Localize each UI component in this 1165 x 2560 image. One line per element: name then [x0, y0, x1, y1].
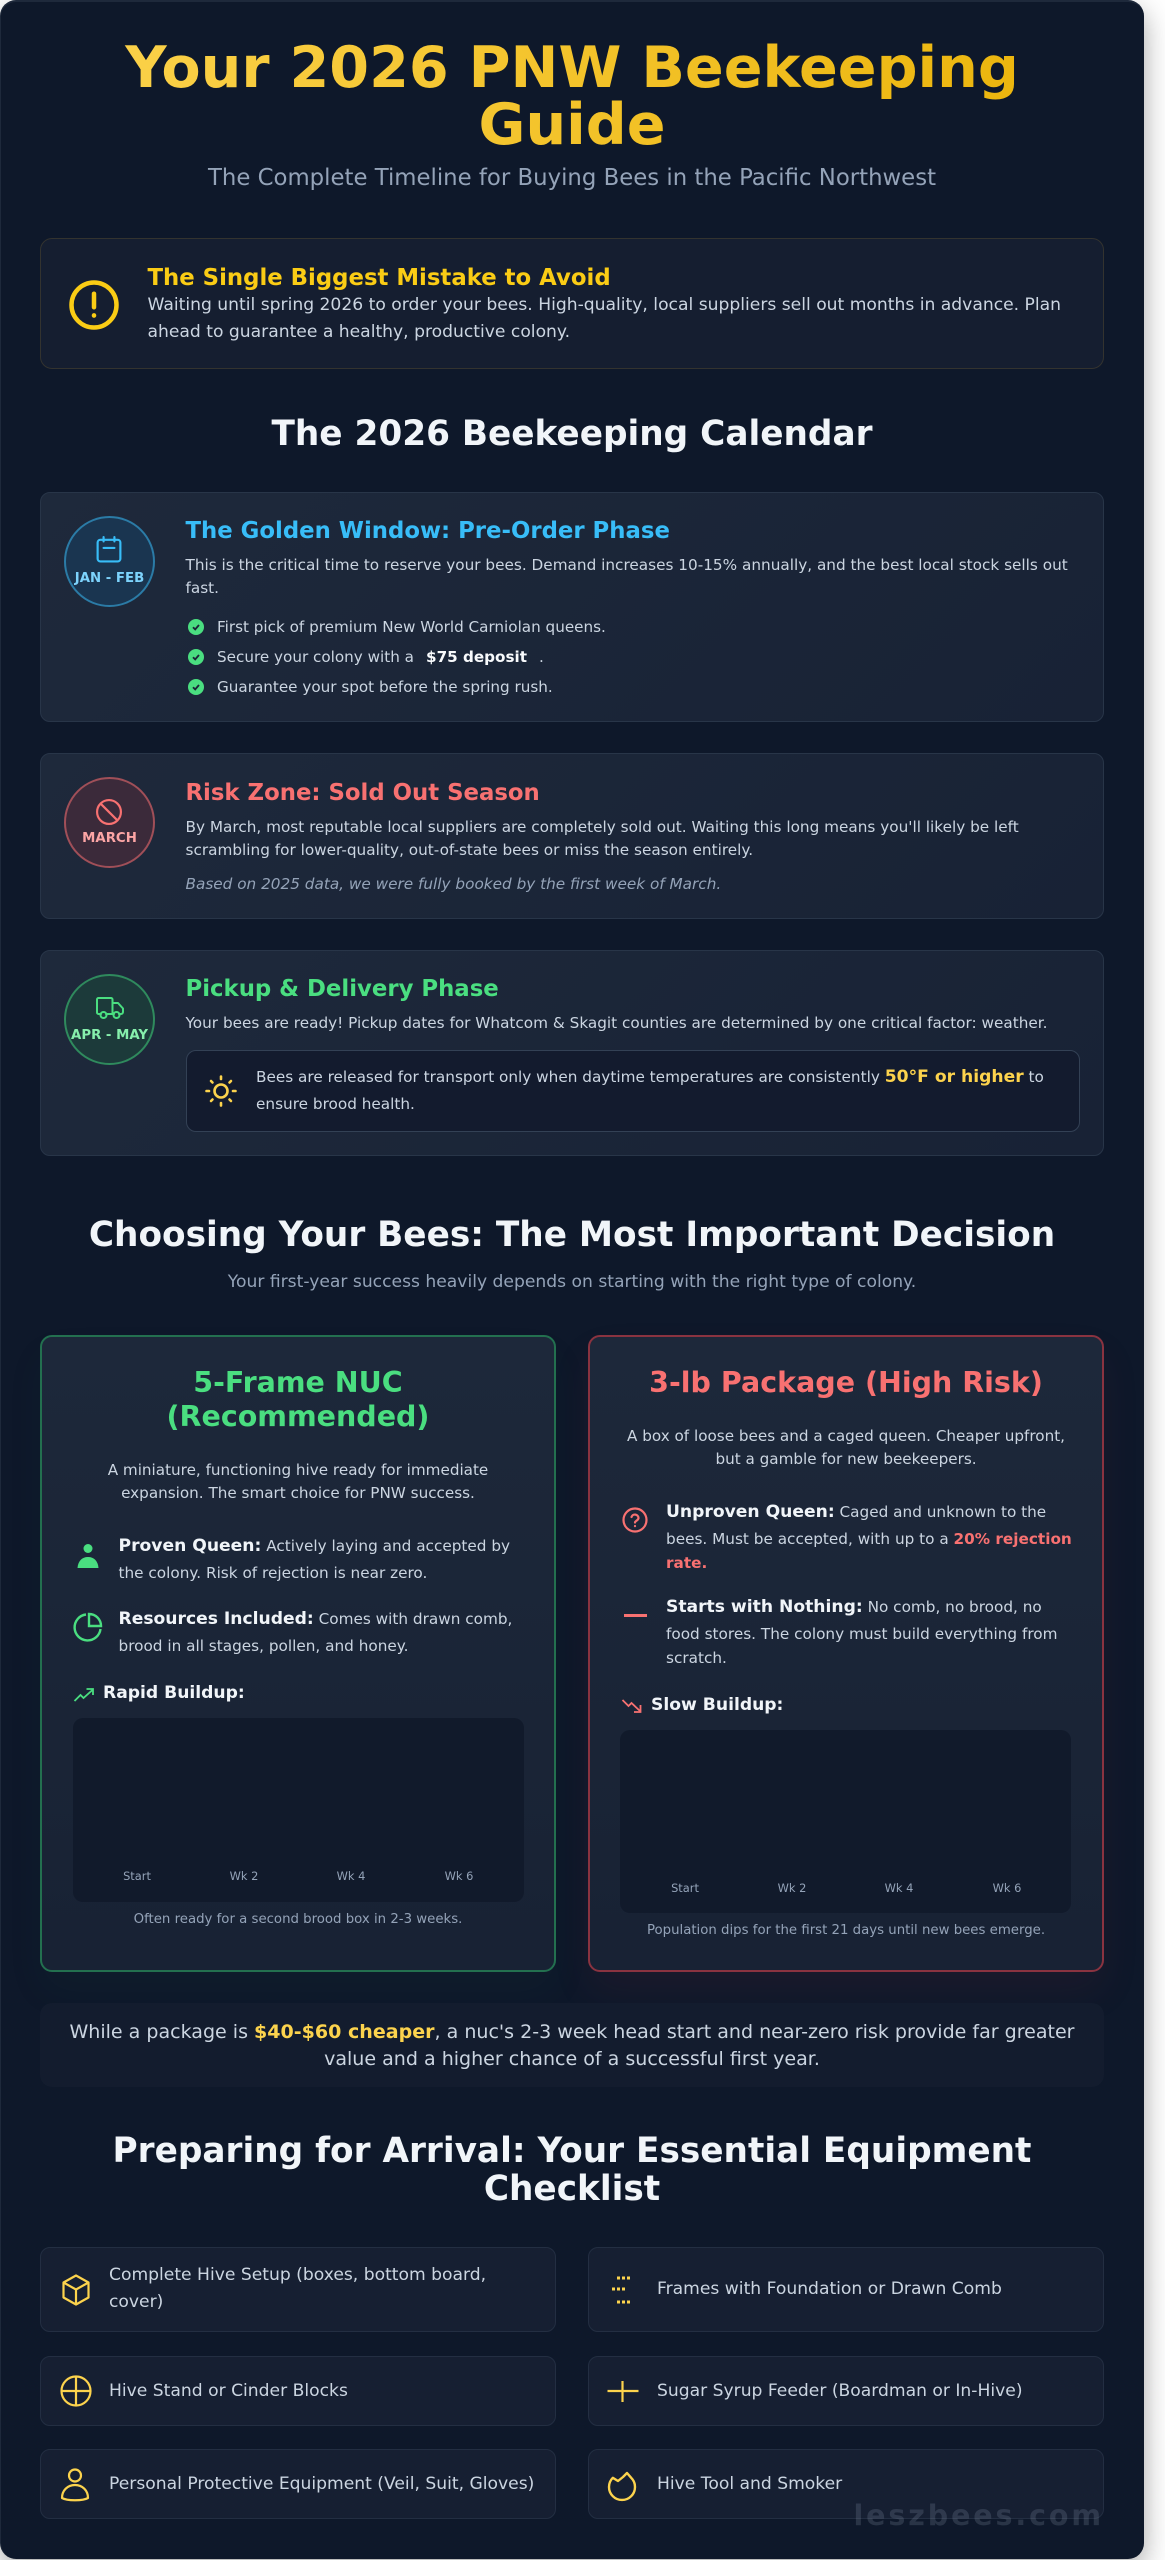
- chart: slow buildup: [620, 1730, 1071, 1913]
- pickup heading: Pickup & Delivery Phase: [186, 976, 499, 1002]
- resources text: Resources Included: Comes with drawn comb,: [118, 1609, 512, 1629]
- rapid buildup label: Rapid Buildup:: [103, 1683, 245, 1703]
- NUC description: expansion. The smart choice for PNW success.: [121, 1484, 475, 1502]
- badge: Apr-May: [64, 974, 155, 1065]
- resources text: [118, 1609, 512, 1655]
- icon: smoker flame: [608, 2472, 636, 2502]
- proven queen text: the colony. Risk of rejection is near zero.: [118, 1564, 427, 1582]
- callout text: Bees are released for transport only when daytime temperatures are consistently 50°F or higher to: [256, 1067, 1044, 1087]
- icon: person outline: [60, 2468, 90, 2502]
- axis label: start: Start: [671, 1881, 699, 1895]
- summary text: [69, 2020, 1075, 2070]
- icon: trend up: [74, 1688, 94, 1702]
- NUC description: A miniature, functioning hive ready for immediate: [108, 1461, 488, 1479]
- benefit 2 period: .: [539, 648, 544, 666]
- item: feeder: [588, 2356, 1104, 2426]
- NUC heading: 5-Frame NUC: [193, 1366, 403, 1399]
- summary text: value and a higher chance of a successful first year.: [324, 2048, 820, 2070]
- risk zone text: [186, 818, 1019, 859]
- NUC chart caption: Often ready for a second brood box in 2-3 weeks.: [134, 1912, 462, 1926]
- starts with nothing text: scratch.: [666, 1649, 727, 1667]
- NUC description: [108, 1461, 488, 1502]
- golden window text: fast.: [186, 579, 219, 597]
- icon: question: [622, 1507, 648, 1533]
- risk zone note: Based on 2025 data, we were fully booked by the first week of March.: [186, 874, 721, 892]
- golden window text: This is the critical time to reserve your bees. Demand increases 10-15% annually, and the best local stock sells out: [186, 556, 1068, 574]
- alert body text: Waiting until spring 2026 to order your bees. High-quality, local suppliers sell out months in advance. Plan: [148, 295, 1061, 315]
- NUC heading: [167, 1366, 429, 1433]
- chart: rapid buildup: [73, 1718, 524, 1902]
- slow buildup label: Slow Buildup:: [651, 1695, 783, 1715]
- unproven queen text: bees. Must be accepted, with up to a 20% rejection: [666, 1530, 1072, 1548]
- icon: truck: [96, 997, 124, 1019]
- badge: Jan-Feb: [64, 516, 155, 607]
- starts with nothing text: Starts with Nothing: No comb, no brood, no: [666, 1597, 1042, 1617]
- package heading: 3-lb Package (High Risk): [649, 1366, 1043, 1399]
- badge: March: [64, 777, 155, 868]
- golden window text: [185, 556, 1068, 597]
- unproven queen text: [666, 1502, 1072, 1572]
- title: [40, 40, 1104, 154]
- subtitle: The Complete Timeline for Buying Bees in the Pacific Northwest: [208, 165, 936, 191]
- NUC heading: (Recommended): [167, 1400, 429, 1433]
- panel: pickup and delivery: [40, 950, 1104, 1156]
- benefit 3: Guarantee your spot before the spring rush.: [217, 678, 553, 696]
- icon: plus: [608, 2381, 638, 2402]
- unproven queen text: Unproven Queen: Caged and unknown to the: [666, 1502, 1046, 1522]
- icon: check 1: [188, 619, 204, 635]
- axis label: week 4: Wk 4: [885, 1881, 913, 1895]
- benefit 1: First pick of premium New World Carniolan queens.: [217, 618, 606, 636]
- panel: price summary: [40, 2003, 1104, 2087]
- callout text: ensure brood health.: [256, 1095, 415, 1113]
- axis label: week 2: Wk 2: [230, 1869, 258, 1883]
- panel: 5-frame NUC: [40, 1335, 556, 1972]
- icon: trend down: [622, 1699, 642, 1713]
- axis label: week 4: Wk 4: [337, 1869, 365, 1883]
- icon: resources pie: [73, 1612, 102, 1642]
- icon: warning circle: [69, 280, 119, 330]
- benefit 2: Secure your colony with a: [217, 648, 414, 666]
- golden window heading: The Golden Window: Pre-Order Phase: [186, 518, 670, 544]
- alert body text: ahead to guarantee a healthy, productive colony.: [148, 322, 570, 342]
- axis label: start: Start: [123, 1869, 151, 1883]
- item: hive tool and smoker: [588, 2449, 1104, 2519]
- proven queen text: Proven Queen: Actively laying and accepted by: [118, 1536, 510, 1556]
- choosing subheading: Your first-year success heavily depends on starting with the right type of colony.: [228, 1272, 916, 1292]
- proven queen text: [118, 1536, 510, 1582]
- watermark: leszbees.com: [854, 2499, 1104, 2532]
- badge label: APR - MAY: [71, 1028, 148, 1043]
- panel: golden window: [40, 492, 1104, 722]
- heading: choosing your bees: Choosing Your Bees: The Most Important Decision: [89, 1215, 1055, 1255]
- badge label: JAN - FEB: [75, 570, 144, 586]
- icon: proven queen: [78, 1544, 98, 1568]
- item: hive setup: [40, 2247, 556, 2332]
- icon: check 3: [188, 679, 204, 695]
- icon: sun: [205, 1075, 237, 1107]
- axis label: week 6: Wk 6: [993, 1881, 1021, 1895]
- panel: risk zone: [40, 753, 1104, 919]
- icon: check 2: [188, 649, 204, 665]
- unproven queen text: rate.: [666, 1554, 707, 1572]
- risk zone heading: Risk Zone: Sold Out Season: [186, 780, 540, 806]
- icon: crosshair circle: [60, 2375, 92, 2407]
- icon: box: [62, 2274, 90, 2306]
- item text: Sugar Syrup Feeder (Boardman or In-Hive): [657, 2380, 1023, 2400]
- starts with nothing text: food stores. The colony must build everything from: [666, 1625, 1058, 1643]
- panel: 3-lb package: [588, 1335, 1104, 1972]
- package description: A box of loose bees and a caged queen. Cheaper upfront,: [627, 1427, 1065, 1445]
- package chart caption: Population dips for the first 21 days until new bees emerge.: [647, 1922, 1045, 1938]
- item: frames: [588, 2247, 1104, 2332]
- resources text: brood in all stages, pollen, and honey.: [118, 1637, 408, 1655]
- badge label: MARCH: [82, 830, 137, 846]
- heading: equipment checklist: [113, 2130, 1031, 2208]
- icon: ban: [96, 799, 122, 825]
- heading: equipment checklist: Checklist: [484, 2168, 660, 2208]
- heading: equipment checklist: Preparing for Arrival: Your Essential Equipment: [113, 2130, 1031, 2170]
- item text: [109, 2265, 486, 2312]
- axis label: week 2: Wk 2: [778, 1881, 806, 1895]
- item: hive stand: [40, 2356, 556, 2426]
- risk zone text: scrambling for lower-quality, out-of-state bees or miss the season entirely.: [186, 841, 753, 859]
- icon: dash: [624, 1614, 647, 1617]
- heading: calendar: The 2026 Beekeeping Calendar: [271, 414, 873, 454]
- item text: Personal Protective Equipment (Veil, Suit, Gloves): [109, 2474, 534, 2494]
- pickup text: Your bees are ready! Pickup dates for Whatcom & Skagit counties are determined by one critical factor: weather.: [186, 1014, 1048, 1032]
- risk zone text: By March, most reputable local suppliers are completely sold out. Waiting this long means you'll likely be left: [186, 818, 1019, 836]
- callout: temperature rule: [186, 1050, 1080, 1132]
- summary text: While a package is $40-$60 cheaper, a nuc's 2-3 week head start and near-zero risk provide far greater: [69, 2020, 1075, 2042]
- item text: Frames with Foundation or Drawn Comb: [657, 2279, 1002, 2299]
- title: Your 2026 PNW Beekeeping: [125, 35, 1019, 101]
- icon: calendar: [96, 536, 122, 562]
- package description: [627, 1427, 1065, 1468]
- panel: biggest mistake alert: [40, 238, 1104, 369]
- icon: dotted frames: [612, 2276, 630, 2304]
- package description: but a gamble for new beekeepers.: [715, 1450, 977, 1468]
- callout text: [256, 1067, 1044, 1113]
- alert heading: The Single Biggest Mistake to Avoid: [148, 265, 611, 291]
- benefit 2 deposit: $75 deposit: [426, 648, 527, 666]
- axis label: week 6: Wk 6: [445, 1869, 473, 1883]
- starts with nothing text: [666, 1597, 1058, 1667]
- item text: Hive Tool and Smoker: [657, 2474, 842, 2494]
- alert body text: [148, 295, 1061, 342]
- item text: Hive Stand or Cinder Blocks: [109, 2380, 348, 2400]
- checklist: golden window benefits: [188, 618, 606, 696]
- item: protective equipment: [40, 2449, 556, 2519]
- title: Guide: [478, 92, 665, 158]
- item text: cover): [109, 2292, 163, 2312]
- item text: Complete Hive Setup (boxes, bottom board,: [109, 2265, 486, 2285]
